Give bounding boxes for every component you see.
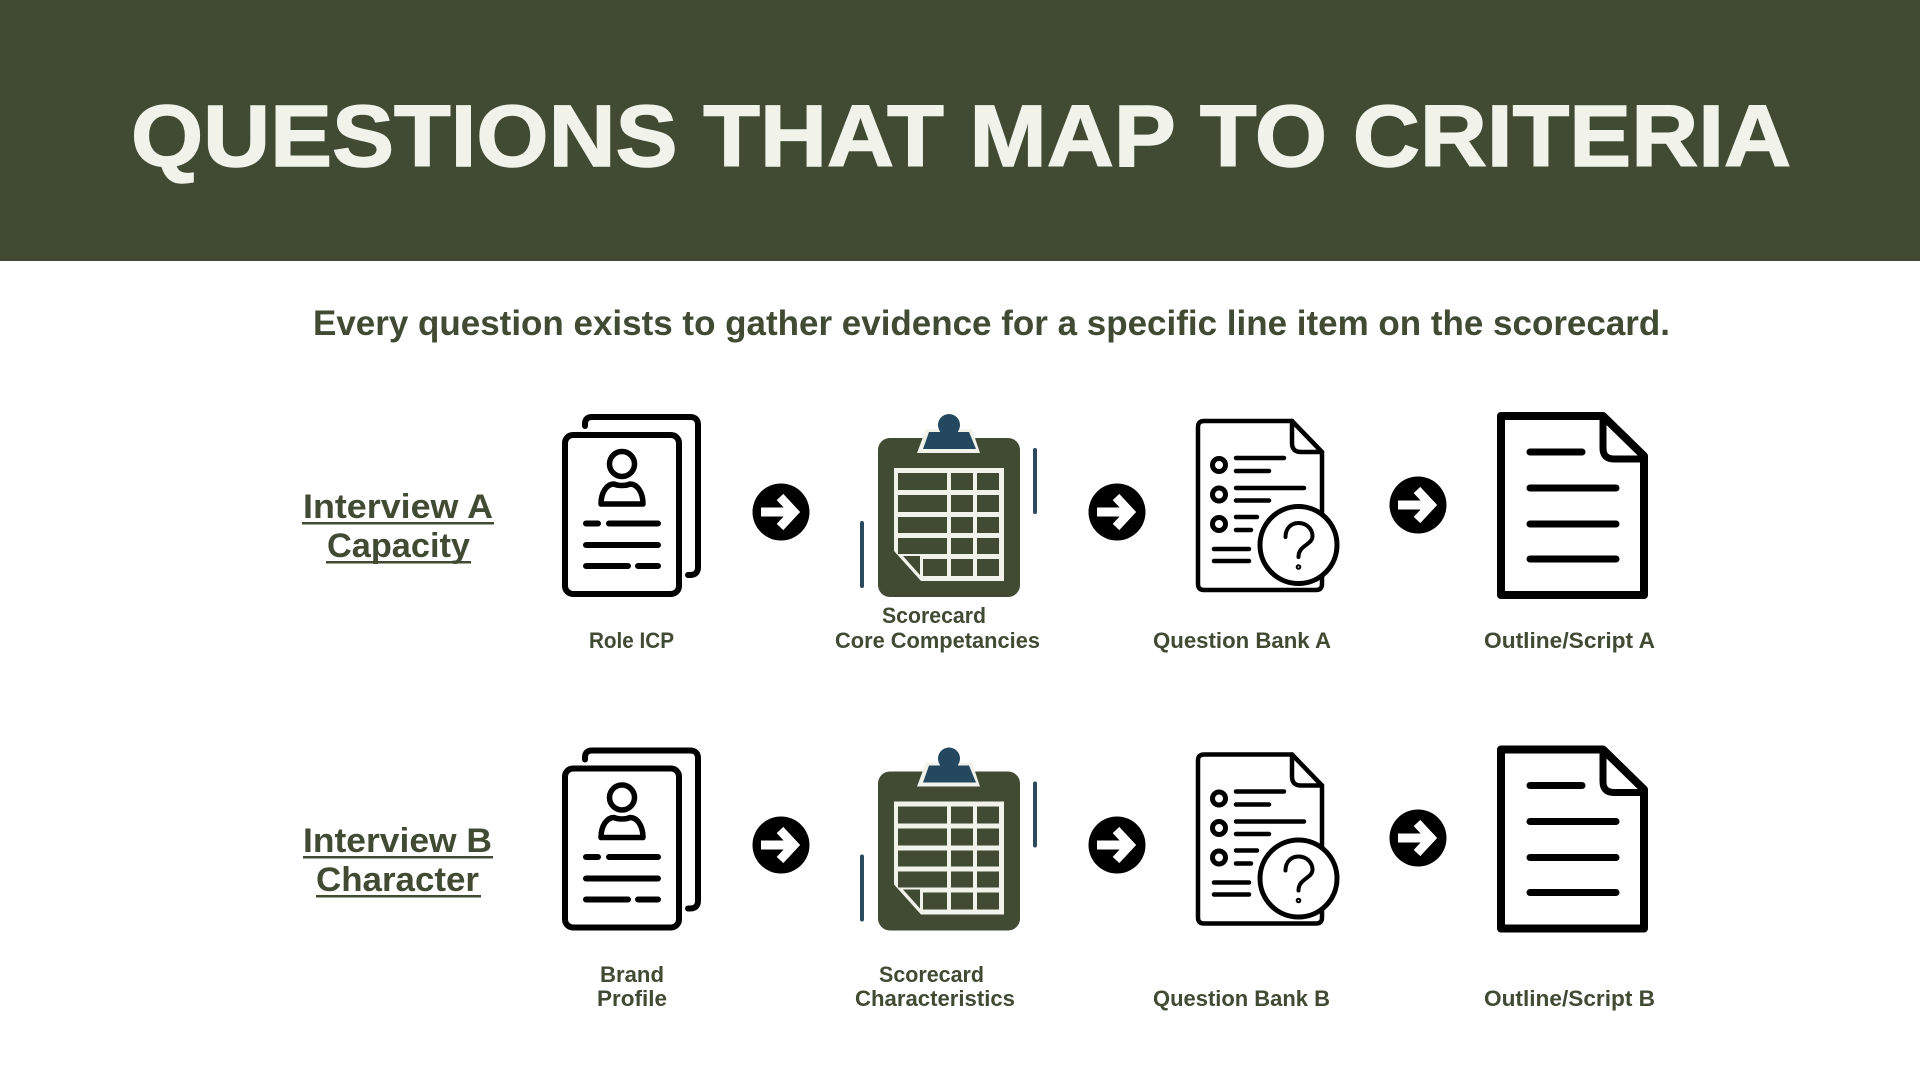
icon: outline document xyxy=(1501,750,1644,928)
arrow xyxy=(752,816,810,874)
label: Question Bank B: Question Bank B xyxy=(1153,986,1330,1011)
label: Brand Profile xyxy=(597,962,667,1011)
row label: Interview A Capacity: Capacity xyxy=(327,527,470,565)
arrow xyxy=(1390,476,1446,534)
label: Brand Profile: Profile xyxy=(597,986,667,1011)
arrow xyxy=(1088,816,1146,874)
label: Outline/Script A: Outline/Script A xyxy=(1484,628,1655,653)
icon: scorecard clipboard xyxy=(862,414,1035,597)
row label: Interview B Character: Character xyxy=(316,861,479,899)
label: Scorecard Characteristics: Scorecard xyxy=(879,962,984,987)
label: Scorecard Core Competancies xyxy=(835,603,1040,653)
arrow xyxy=(1088,484,1146,540)
label: Scorecard Characteristics: Characteristics xyxy=(855,986,1015,1011)
label: Question Bank A: Question Bank A xyxy=(1153,628,1331,653)
header band xyxy=(0,0,1920,261)
label: Scorecard Core Competancies: Core Competancies xyxy=(835,628,1040,653)
label: Role ICP: Role ICP xyxy=(589,628,674,653)
row label: Interview B Character xyxy=(303,822,493,899)
icon: Brand Profile document xyxy=(565,750,698,928)
row label: Interview A Capacity xyxy=(302,488,494,565)
subtitle: Every question exists to gather evidence for a specific line item on the scorecard. xyxy=(313,304,1670,343)
icon: Role ICP document xyxy=(565,417,698,594)
label: Outline/Script B: Outline/Script B xyxy=(1484,986,1655,1011)
label: Brand Profile: Brand xyxy=(600,962,664,987)
icon: question bank document xyxy=(1198,421,1337,590)
arrow xyxy=(752,484,810,540)
row label: Interview A Capacity: Interview A xyxy=(303,488,493,526)
row label: Interview B Character: Interview B xyxy=(303,822,492,860)
arrow xyxy=(1390,810,1446,866)
icon: question bank document xyxy=(1198,754,1337,924)
label: Scorecard Characteristics xyxy=(855,962,1015,1011)
icon: outline document xyxy=(1501,416,1644,595)
icon: scorecard clipboard xyxy=(862,748,1035,930)
title: QUESTIONS THAT MAP TO CRITERIA xyxy=(131,88,1791,185)
label: Scorecard Core Competancies: Scorecard xyxy=(882,603,986,628)
